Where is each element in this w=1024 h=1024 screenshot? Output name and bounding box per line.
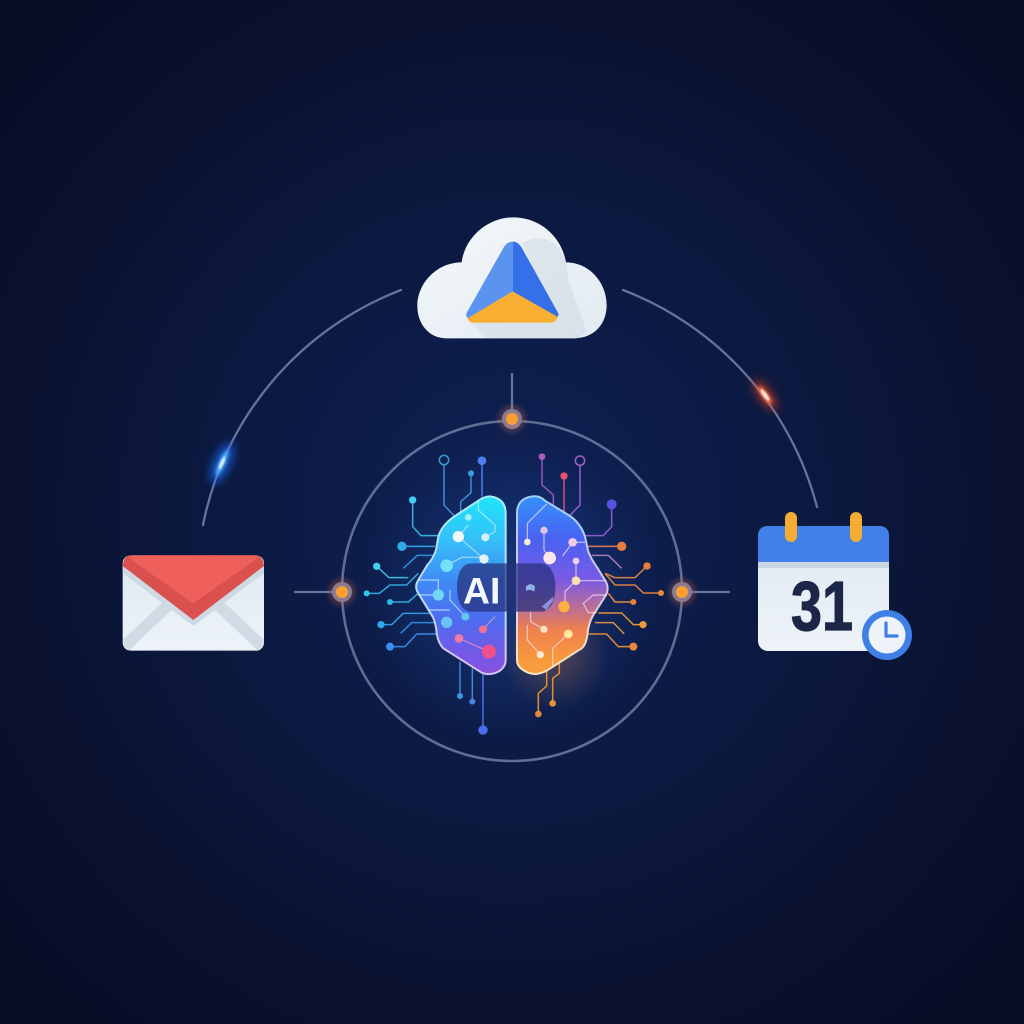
- left hemisphere nodes: [433, 514, 496, 659]
- left hemisphere: [416, 496, 506, 674]
- left terminal dots: [364, 455, 488, 735]
- right circuit traces: [538, 457, 661, 714]
- cloud body: [417, 217, 607, 338]
- left hemisphere circuits: [418, 502, 495, 652]
- calendar page: [758, 526, 889, 651]
- right hemisphere nodes: [524, 527, 580, 658]
- pill fragments: [526, 584, 553, 610]
- icon: calendar with clock: [758, 512, 912, 660]
- node: right: [665, 575, 699, 609]
- AI label pill: [457, 563, 555, 612]
- flap shadow: [123, 566, 264, 626]
- envelope body: [123, 555, 264, 651]
- clock badge: [862, 610, 912, 660]
- cloud shadow: [470, 238, 587, 338]
- node: left: [325, 575, 359, 609]
- blue comet on left arc: [206, 440, 238, 486]
- connector stubs: [294, 373, 730, 592]
- icon: envelope: [123, 555, 264, 651]
- triangle right face: [513, 242, 558, 318]
- triangle left face: [466, 242, 513, 318]
- node: top: [495, 402, 529, 436]
- flap dark: [123, 555, 264, 620]
- AI text: AI: [463, 569, 500, 611]
- date number: 31: [791, 567, 853, 645]
- calendar header: [758, 526, 889, 562]
- triangle base: [468, 291, 557, 323]
- flap light: [128, 555, 259, 603]
- brain glow: [362, 440, 662, 740]
- right hemisphere: [517, 496, 608, 674]
- AI brain: [364, 453, 664, 735]
- right binder pin: [850, 512, 862, 542]
- red comet on right arc: [750, 377, 780, 413]
- left binder pin: [785, 512, 797, 542]
- left circuit traces: [367, 461, 483, 730]
- orange glow: [500, 600, 610, 710]
- right terminal dots: [535, 453, 664, 717]
- icon: cloud with triangle logo: [417, 217, 607, 338]
- central ring: [342, 421, 682, 761]
- right hemisphere circuits: [527, 504, 607, 667]
- outer connection arcs: [203, 290, 817, 525]
- header shadow band: [758, 562, 889, 568]
- envelope folds: [123, 602, 264, 650]
